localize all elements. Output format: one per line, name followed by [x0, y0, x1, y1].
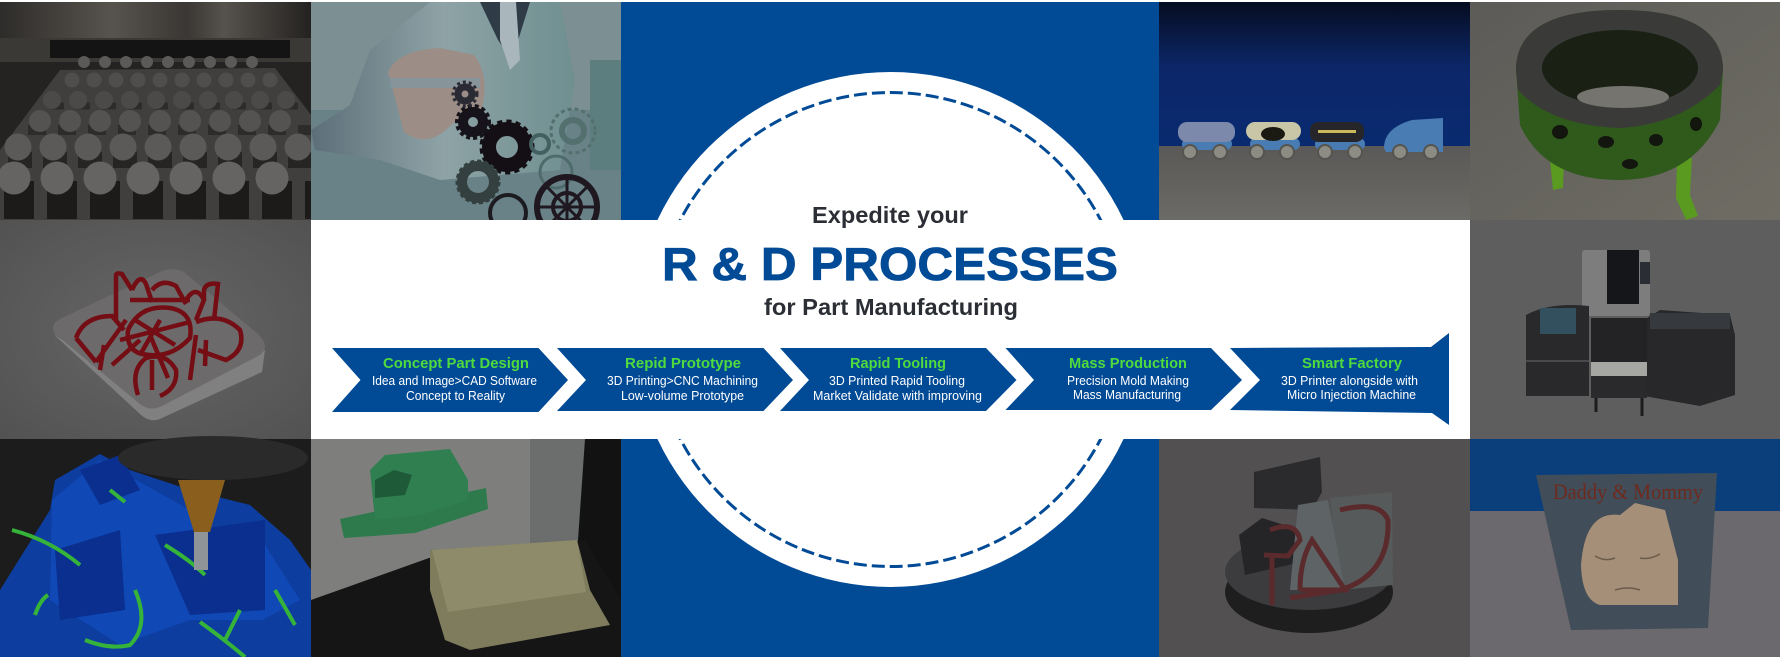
photo tile: cast figurines on printer tray	[0, 2, 311, 220]
process step 5: Smart Factory: 3D Printer alongside with	[1281, 374, 1418, 388]
process step 4: Mass Production: Mass Manufacturing	[1073, 388, 1181, 402]
photo tile: blue CNC toolpath with milling cutter	[0, 436, 311, 657]
photo tile: green and black 3D printed ring on legs	[1470, 2, 1780, 220]
process step 2: Repid Prototype	[557, 348, 793, 411]
center blue panel with white circle	[621, 2, 1159, 657]
process step 2: Repid Prototype: 3D Printing>CNC Machining	[607, 374, 758, 388]
process step 3: Rapid Tooling: Rapid Tooling	[850, 355, 946, 372]
photo tile: toy train on shelf against blue wall	[1159, 2, 1470, 220]
process step 4: Mass Production: Mass Production	[1069, 355, 1187, 372]
process step 2: Repid Prototype: Low-volume Prototype	[621, 389, 744, 403]
process step 1: Concept Part Design	[332, 348, 568, 412]
process step 4: Mass Production	[1006, 348, 1242, 410]
photo tile: businessman hand touching gears	[311, 2, 621, 237]
white center band	[311, 220, 1469, 439]
title: R & D PROCESSES: R & D PROCESSES	[662, 238, 1118, 290]
process step 1: Concept Part Design: Concept to Reality	[406, 389, 506, 403]
heading: Expedite your: Expedite your	[812, 202, 968, 228]
process step 3: Rapid Tooling	[780, 348, 1016, 411]
process step 1: Concept Part Design: Concept Part Design	[383, 355, 529, 372]
photo tile: mold insert with dark red channels	[1159, 439, 1470, 657]
process step 3: Rapid Tooling: Market Validate with improving	[813, 389, 982, 403]
process step 5: Smart Factory: Micro Injection Machine	[1287, 388, 1416, 402]
process step 4: Mass Production: Precision Mold Making	[1067, 374, 1189, 388]
process step 5: Smart Factory: Smart Factory	[1302, 355, 1403, 372]
photo tile: metal plate with red conformal cooling channels	[0, 220, 311, 439]
subtitle: for Part Manufacturing: for Part Manufacturing	[764, 294, 1018, 320]
photo tile: baby face block with Daddy & Mommy text: Daddy & Mommy	[1553, 479, 1703, 504]
process step 1: Concept Part Design: Idea and Image>CAD Software	[372, 374, 537, 388]
process step 5: Smart Factory	[1230, 333, 1449, 425]
process step 2: Repid Prototype: Repid Prototype	[625, 355, 741, 372]
process step 3: Rapid Tooling: 3D Printed Rapid Tooling	[829, 374, 965, 388]
photo tile: baby face block with Daddy & Mommy text	[1470, 439, 1780, 657]
photo tile: group of industrial 3D printers	[1470, 220, 1780, 439]
photo tile: CAD model of van and printed mold by monitor	[311, 439, 621, 657]
